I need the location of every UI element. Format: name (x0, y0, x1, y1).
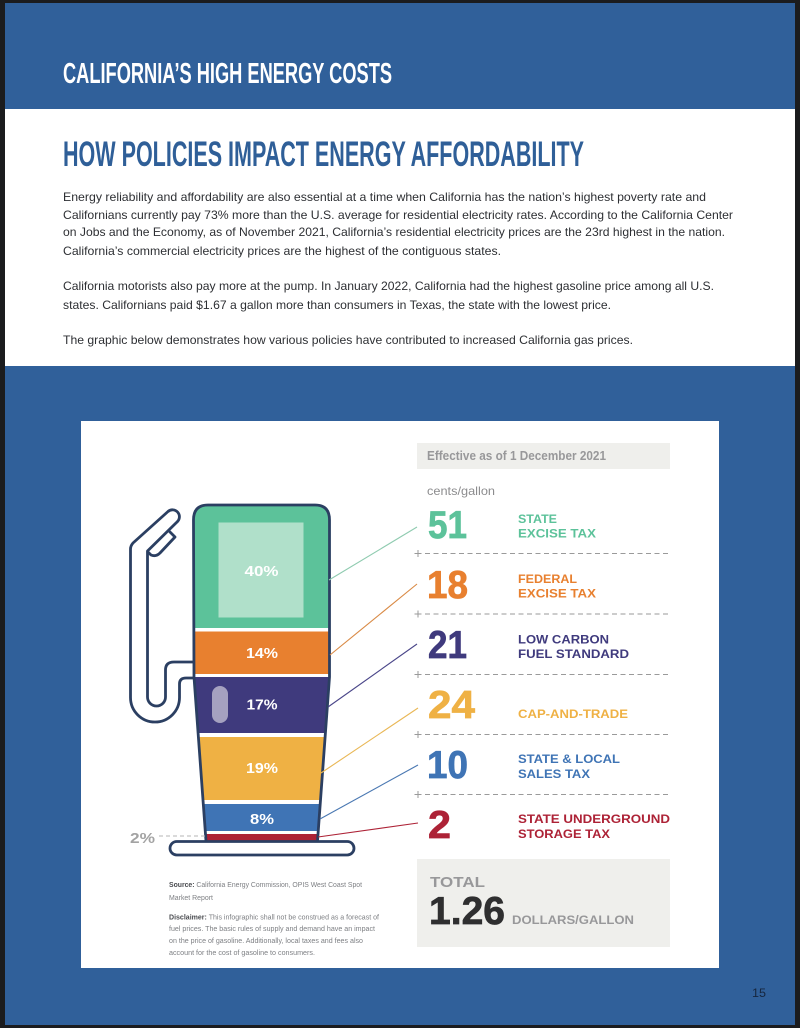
panel: intro text (5, 109, 795, 366)
label: 2% (130, 830, 205, 847)
row: state and local sales tax: 10 (427, 744, 468, 787)
row: state and local sales tax: STATE & LOCAL (518, 752, 620, 766)
paragraph: gasoline prices: states. Californians paid $1.67 a gallon more than consumers in Texas, the state with the lowest price. (63, 298, 611, 312)
row: low carbon fuel standard (428, 624, 629, 667)
unit label: cents/gallon (427, 484, 495, 498)
row: federal excise tax: 18 (427, 564, 468, 607)
row: state underground storage tax: 2 (428, 804, 451, 847)
row: federal excise tax: FEDERAL (518, 572, 577, 586)
pump segment: 19% yellow (199, 737, 324, 800)
row: low carbon fuel standard: LOW CARBON (518, 633, 609, 647)
effective date tag: Effective as of 1 December 2021 (427, 449, 606, 463)
pump segment: 19% yellow: 19% (246, 761, 278, 777)
pump segment: 2% red (206, 834, 318, 841)
total box: 1.26 (429, 890, 505, 933)
row: cap-and-trade: 24 (428, 684, 476, 727)
source and disclaimer: Market Report (169, 895, 213, 902)
row dividers (414, 550, 670, 798)
paragraph: gasoline prices (63, 279, 714, 312)
icon: hose and nozzle (130, 510, 194, 722)
pump segment: 8% blue: 8% (250, 812, 274, 828)
source and disclaimer: Disclaimer: This infographic shall not be construed as a forecast of (169, 914, 379, 922)
source and disclaimer: account for the cost of gasoline to consumers. (169, 950, 315, 957)
paragraph: graphic intro: The graphic below demonstrates how various policies have contributed to increased California gas prices. (63, 333, 633, 347)
row: state excise tax: STATE (518, 512, 557, 526)
row: low carbon fuel standard: FUEL STANDARD (518, 647, 629, 661)
row: state excise tax: 51 (428, 504, 467, 547)
pump segment: 8% blue (204, 804, 320, 831)
pump segment: 40% green (193, 505, 330, 628)
total box (417, 859, 670, 947)
paragraph: electricity prices: Energy reliability and affordability are also essential at a time when California has the nation’s highest poverty rate and (63, 190, 706, 204)
source and disclaimer: fuel prices. The basic rules of supply and demand have an impact (169, 926, 375, 933)
row: cap-and-trade: CAP-AND-TRADE (518, 707, 628, 721)
row: state excise tax (428, 504, 596, 547)
row: cap-and-trade (428, 684, 628, 727)
row: state and local sales tax (427, 744, 620, 787)
row: state excise tax: EXCISE TAX (518, 526, 596, 540)
pump base (170, 842, 354, 855)
gas pump chart (130, 505, 354, 855)
pump segment: 14% orange (193, 632, 330, 674)
header title: CALIFORNIA’S HIGH ENERGY COSTS (63, 58, 392, 90)
total box: TOTAL (430, 874, 485, 891)
paragraph: electricity prices: California’s commercial electricity prices are the highest of the contiguous states. (63, 244, 501, 258)
pump segment: 17% purple (194, 677, 330, 733)
paragraph: electricity prices: Californians currently pay 73% more than the U.S. average for residential electricity rates. According to the California Center (63, 208, 733, 222)
total box: DOLLARS/GALLON (512, 913, 634, 927)
row: state and local sales tax: SALES TAX (518, 767, 590, 781)
source and disclaimer: Source: California Energy Commission, OPIS West Coast Spot (169, 882, 362, 889)
row: federal excise tax: EXCISE TAX (518, 586, 596, 600)
pump segment: 17% purple: 17% (246, 698, 278, 714)
label: 2%: 2% (130, 830, 155, 847)
paragraph: electricity prices: on Jobs and the Economy, as of November 2021, California’s residential electricity prices are the 23rd highest in the nation. (63, 225, 725, 239)
row: state underground storage tax: STORAGE TAX (518, 827, 610, 841)
connector lines (318, 527, 418, 837)
row: low carbon fuel standard: 21 (428, 624, 467, 667)
row: federal excise tax (427, 564, 596, 607)
pump segment: 40% green: 40% (244, 564, 279, 580)
row: state underground storage tax: STATE UNDERGROUND (518, 812, 670, 826)
effective date tag (417, 443, 670, 469)
page number: 15 (752, 986, 766, 1000)
row: state underground storage tax (428, 804, 670, 847)
paragraph: gasoline prices: California motorists also pay more at the pump. In January 2022, California had the highest gasoline price among all U.S. (63, 279, 714, 293)
source and disclaimer: on the price of gasoline. Additionally, local taxes and fees also (169, 938, 363, 945)
source and disclaimer (169, 882, 379, 957)
pump segment: 14% orange: 14% (246, 646, 278, 662)
paragraph: electricity prices (63, 190, 733, 258)
panel: gas price infographic (81, 421, 719, 968)
pump outline (194, 505, 330, 841)
